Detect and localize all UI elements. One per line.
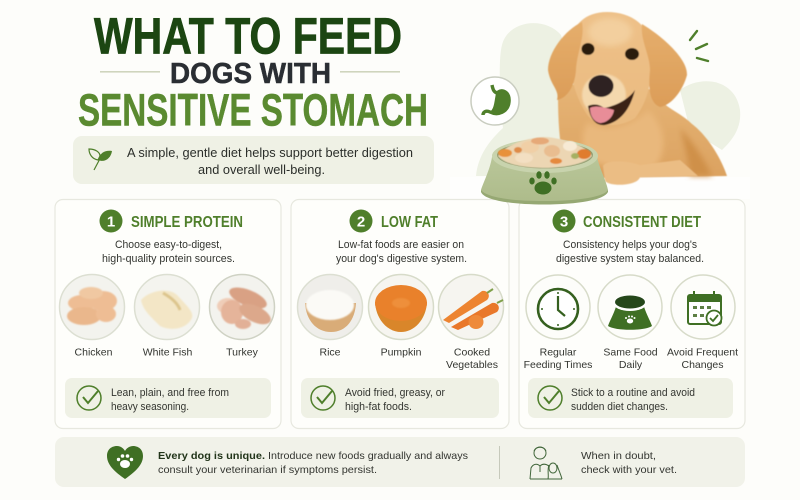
icon labels: Same Food: [603, 346, 658, 358]
dog head: [569, 12, 652, 125]
callout: Lean, plain, and free from: [111, 387, 229, 399]
title: [78, 8, 428, 136]
callout: Avoid fried, greasy, or: [345, 387, 445, 399]
food bowl: [481, 137, 608, 204]
callout: [65, 378, 271, 418]
icon: excitement marks: [690, 31, 708, 61]
dog muzzle: [582, 74, 626, 116]
dog mouth: [588, 90, 635, 125]
note text: [158, 450, 468, 476]
food labels: [75, 346, 259, 358]
description: Consistency helps your dog's: [563, 239, 697, 251]
bottom banner: [55, 437, 745, 487]
icon labels: Changes: [681, 359, 724, 371]
vet reminder text: check with your vet.: [581, 464, 677, 476]
food labels: Pumpkin: [381, 346, 422, 358]
dog body: [558, 80, 727, 178]
vet reminder text: When in doubt,: [581, 450, 656, 462]
icon: check: [538, 386, 562, 410]
title: WHAT TO FEED: [94, 8, 402, 64]
number badge 3: [552, 210, 576, 232]
food: cooked vegetables: [438, 274, 504, 340]
subtitle panel: and overall well-being.: [198, 162, 325, 177]
icon labels: [524, 346, 738, 371]
icon: check: [311, 386, 335, 410]
callout: [301, 378, 499, 418]
dog left ear: [548, 22, 583, 100]
food labels: [319, 346, 498, 371]
panel: consistent diet: [519, 200, 745, 428]
callout: high-fat foods.: [345, 401, 412, 413]
callout: [528, 378, 733, 418]
food: turkey: [210, 274, 274, 340]
food labels: Cooked: [454, 346, 490, 358]
icon: check: [77, 386, 101, 410]
description: [336, 239, 467, 265]
heading: simple protein: SIMPLE PROTEIN: [131, 214, 243, 231]
icon: stomach badge: [471, 77, 519, 125]
dog tongue: [590, 107, 614, 123]
food: white fish: [134, 274, 200, 340]
heading: low fat: LOW FAT: [381, 214, 438, 231]
subtitle panel: [73, 136, 434, 184]
dog right ear: [642, 24, 687, 107]
dog: [548, 12, 727, 185]
note text: Every dog is unique.: [158, 450, 265, 462]
dog chest fur: [582, 110, 663, 169]
food: chicken: [60, 274, 124, 340]
number badge 2: 2: [357, 214, 365, 230]
food labels: Vegetables: [446, 359, 498, 371]
icon: clock: [526, 275, 590, 339]
food labels: Chicken: [75, 346, 113, 358]
description: [102, 239, 235, 265]
icon labels: Daily: [619, 359, 643, 371]
panel: low fat: [291, 200, 509, 428]
icon labels: Avoid Frequent: [667, 346, 738, 358]
icon: calendar: [671, 275, 735, 339]
food: pumpkin: [368, 274, 434, 340]
bowl food: [498, 137, 592, 168]
dog forehead highlight: [588, 18, 632, 46]
number badge 3: 3: [560, 214, 568, 230]
number badge 2: [350, 210, 372, 232]
food labels: Turkey: [226, 346, 259, 358]
note text: consult your veterinarian if symptoms persist.: [158, 464, 377, 476]
table surface: [450, 177, 750, 199]
dog nose: [588, 75, 614, 97]
icon: leaf: [89, 149, 112, 170]
subtitle panel: A simple, gentle diet helps support better digestion: [127, 145, 413, 160]
number badge 1: 1: [107, 214, 115, 230]
title: SENSITIVE STOMACH: [78, 84, 428, 136]
note text: Introduce new foods gradually and always: [268, 450, 468, 462]
icon labels: Feeding Times: [524, 359, 592, 371]
dog illustration background shapes: [476, 23, 740, 176]
dog eyes: [582, 43, 639, 60]
callout: heavy seasoning.: [111, 401, 189, 413]
panel: simple protein: [55, 200, 281, 428]
dog paw: [603, 160, 698, 185]
vet reminder text: [581, 450, 677, 476]
icon: heart with paw: [107, 446, 143, 479]
heading: consistent diet: CONSISTENT DIET: [583, 214, 701, 231]
callout: sudden diet changes.: [571, 401, 668, 413]
description: [556, 239, 704, 265]
icon: dog bowl: [598, 275, 662, 339]
icon: vet with dog: [530, 447, 562, 479]
icon: bowl paw: [529, 171, 557, 194]
food labels: Rice: [319, 346, 341, 358]
food: rice: [298, 274, 362, 340]
description: Low-fat foods are easier on: [338, 239, 464, 251]
description: your dog's digestive system.: [336, 253, 467, 265]
food labels: White Fish: [143, 346, 192, 358]
callout: Stick to a routine and avoid: [571, 387, 695, 399]
description: high-quality protein sources.: [102, 253, 235, 265]
description: digestive system stay balanced.: [556, 253, 704, 265]
description: Choose easy-to-digest,: [115, 239, 222, 251]
title: DOGS WITH: [170, 58, 331, 90]
dog fur shading: [680, 128, 712, 176]
number badge 1: [100, 210, 122, 232]
icon labels: Regular: [540, 346, 577, 358]
